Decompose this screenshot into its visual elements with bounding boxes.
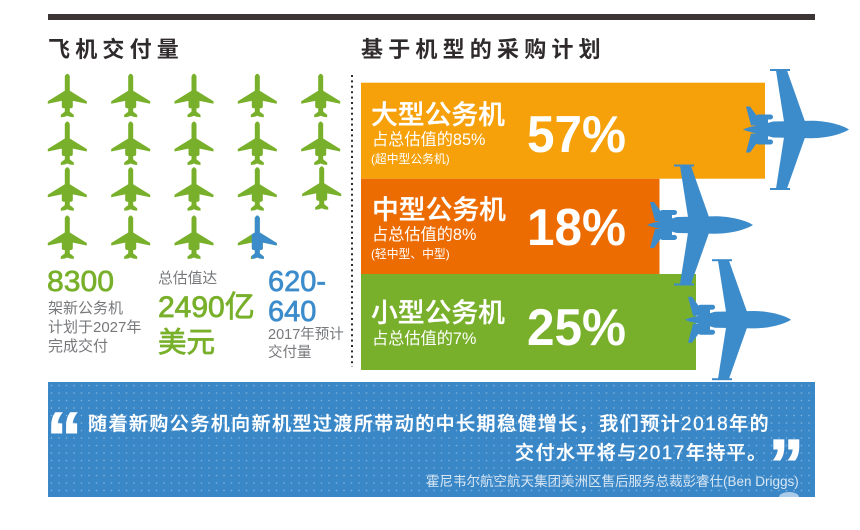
top bar: [48, 14, 815, 20]
opening quote mark: “: [46, 399, 82, 478]
panel: large jets: (超中型公务机): [371, 152, 450, 166]
closing quote mark: ”: [768, 426, 804, 505]
panel: small jets: 小型公务机: [371, 298, 505, 328]
panel: small jets: 25%: [527, 299, 626, 357]
stat: 8300 new aircraft: 架新公务机: [48, 300, 123, 317]
panel: quote: [46, 382, 815, 505]
heading: aircraft deliveries: 飞机交付量: [48, 37, 184, 62]
panel: mid-size jets: [361, 179, 660, 274]
quote text: 随着新购公务机向新机型过渡所带动的中长期稳健增长，我们预计2018年的: [88, 413, 770, 435]
panel: quote: 交付水平将与2017年持平。: [515, 442, 768, 464]
pictogram: aircraft grid: [48, 74, 341, 259]
stat: total value: 美元: [158, 327, 215, 359]
panel: mid-size jets: 18%: [527, 199, 626, 257]
panel: large jets: 占总估值的85%: [372, 131, 485, 149]
panel: small jets: 占总估值的7%: [372, 330, 476, 348]
stat: 8300 new aircraft: [47, 266, 141, 355]
panel: mid-size jets: 占总估值的8%: [372, 226, 476, 244]
icon: plane large: [743, 69, 849, 190]
attribution: 霍尼韦尔航空航天集团美洲区售后服务总裁彭睿仕(Ben Driggs): [426, 474, 799, 489]
stat: 8300 new aircraft: 8300: [47, 266, 114, 298]
stat: total value: [158, 270, 255, 359]
stat: 2017 deliveries: 640: [268, 296, 316, 328]
stat: 8300 new aircraft: 完成交付: [48, 337, 108, 355]
stat: 8300 new aircraft: 计划于2027年: [48, 319, 141, 336]
panel: large jets: [361, 83, 765, 179]
heading: purchase plan by type: 基于机型的采购计划: [361, 37, 606, 62]
panel: mid-size jets: (轻中型、中型): [371, 247, 450, 261]
stat: total value: 2490亿: [158, 291, 255, 324]
panel: mid-size jets: 中型公务机: [372, 195, 506, 225]
stat: 2017 deliveries: 2017年预计: [268, 326, 344, 343]
stat: 2017 deliveries: 620-: [268, 266, 326, 298]
stat: 2017 deliveries: [268, 266, 344, 361]
icon: plane small: [685, 259, 791, 380]
panel: large jets: 大型公务机: [371, 100, 505, 130]
panel: large jets: 57%: [527, 106, 626, 164]
stat: total value: 总估值达: [158, 270, 217, 287]
icon: plane medium: [647, 164, 753, 286]
panel: small jets: [361, 274, 696, 370]
stat: 2017 deliveries: 交付量: [268, 343, 312, 361]
